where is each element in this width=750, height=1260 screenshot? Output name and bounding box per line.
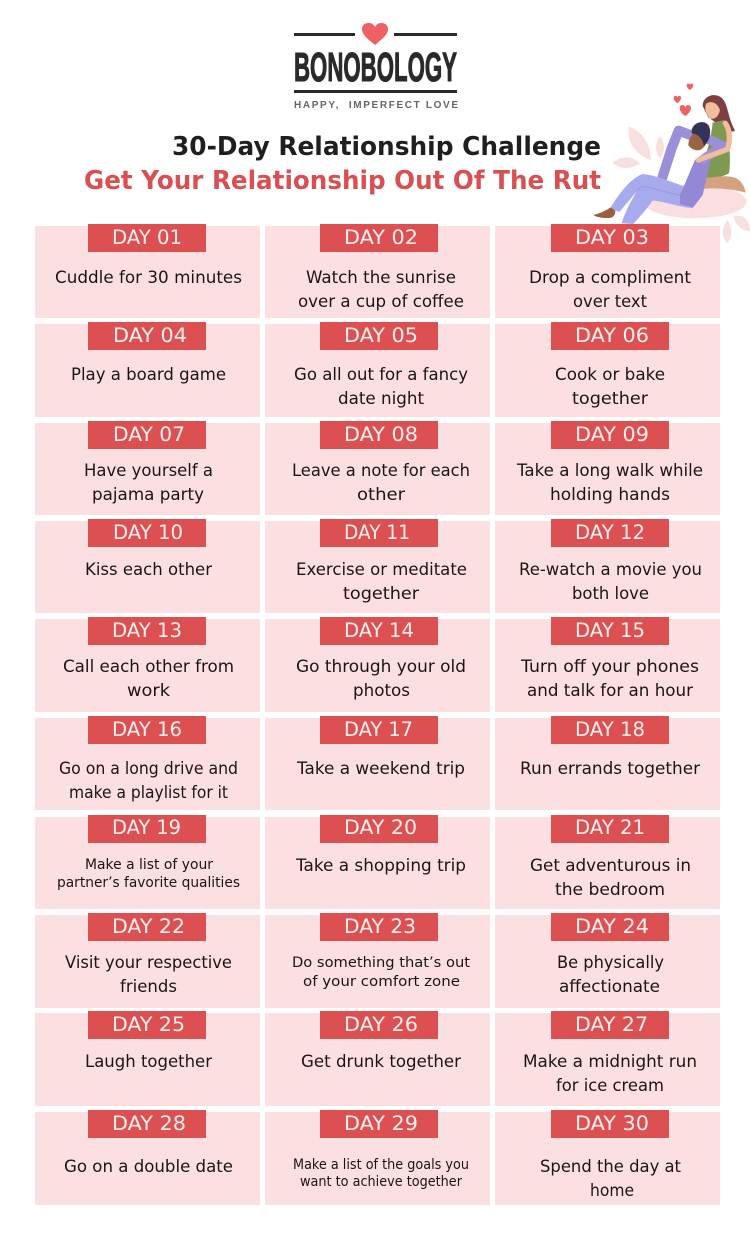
panel: day 02 xyxy=(265,224,490,318)
panel: day 12: DAY 12 xyxy=(575,521,645,544)
panel: day 16: Go on a long drive and xyxy=(59,759,238,779)
panel: day 06 xyxy=(495,322,720,417)
panel: day 30: home xyxy=(590,1181,634,1201)
panel: day 24: affectionate xyxy=(559,977,660,997)
panel: day 11: DAY 11 xyxy=(344,521,410,544)
panel: day 15: and talk for an hour xyxy=(527,681,693,701)
panel: day 25 xyxy=(35,1011,260,1106)
panel: day 11: Exercise or meditate xyxy=(296,560,467,580)
panel: day 23: Do something that’s out xyxy=(292,955,470,971)
panel: day 05: DAY 05 xyxy=(344,324,418,347)
panel: day 06: Cook or bake xyxy=(555,365,665,385)
panel: day 21 xyxy=(495,815,720,909)
panel: day 28: Go on a double date xyxy=(64,1157,233,1177)
panel: day 16: DAY 16 xyxy=(112,718,182,741)
panel: day 05 xyxy=(265,322,490,417)
panel: day 22 xyxy=(35,913,260,1008)
panel: day 14: DAY 14 xyxy=(344,619,414,642)
panel: day 21: DAY 21 xyxy=(575,816,645,839)
panel: day 13 xyxy=(35,617,260,712)
panel: day 14: photos xyxy=(353,681,410,701)
panel: day 12: both love xyxy=(572,584,649,604)
panel: day 18 xyxy=(495,716,720,810)
panel: day 19: Make a list of your xyxy=(85,857,213,873)
panel: day 23: of your comfort zone xyxy=(303,974,460,990)
panel: day 17: DAY 17 xyxy=(344,718,413,741)
logo: Bonobology xyxy=(294,23,458,111)
panel: day 09: DAY 09 xyxy=(575,423,649,446)
subtitle: Get Your Relationship Out Of The Rut xyxy=(84,166,601,196)
panel: day 13: Call each other from xyxy=(63,657,234,677)
panel: day 24: DAY 24 xyxy=(575,915,649,938)
panel: day 25: DAY 25 xyxy=(112,1013,185,1036)
panel: day 03: Drop a compliment xyxy=(529,268,691,288)
panel: day 20: DAY 20 xyxy=(344,816,417,839)
panel: day 09: Take a long walk while xyxy=(516,461,703,481)
panel: day 15: DAY 15 xyxy=(575,619,645,642)
panel: day 01: Cuddle for 30 minutes xyxy=(55,268,242,288)
panel: day 12: Re-watch a movie you xyxy=(519,560,702,580)
woman xyxy=(703,95,735,132)
panel: day 15: Turn off your phones xyxy=(520,657,699,677)
panel: day 05: Go all out for a fancy xyxy=(294,365,468,385)
panel: day 29: DAY 29 xyxy=(344,1112,418,1135)
panel: day 30 xyxy=(495,1110,720,1205)
panel: day 20 xyxy=(265,815,490,909)
man: legs xyxy=(610,174,693,224)
panel: day 19: partner’s favorite qualities xyxy=(57,875,240,891)
panel: day 01: DAY 01 xyxy=(112,226,182,249)
panel: day 07: DAY 07 xyxy=(113,423,185,446)
panel: day 04: DAY 04 xyxy=(113,324,187,347)
cushion xyxy=(643,185,747,218)
panel: day 25: Laugh together xyxy=(85,1052,212,1072)
panel: day 22: DAY 22 xyxy=(112,915,185,938)
panel: day 29: want to achieve together xyxy=(300,1174,462,1190)
panel: day 09: holding hands xyxy=(550,485,670,505)
panel: day 09 xyxy=(495,421,720,515)
panel: day 03: over text xyxy=(573,292,647,312)
panel: day 11 xyxy=(265,519,490,613)
hearts xyxy=(674,83,693,116)
panel: day 18: DAY 18 xyxy=(575,718,645,741)
panel: day 13: DAY 13 xyxy=(112,619,182,642)
panel: day 23: DAY 23 xyxy=(344,915,416,938)
title: 30-Day Relationship Challenge xyxy=(172,132,601,162)
panel: day 26 xyxy=(265,1011,490,1106)
panel: day 17: Take a weekend trip xyxy=(296,759,465,779)
panel: day 24 xyxy=(495,913,720,1008)
panel: day 07 xyxy=(35,421,260,515)
logo: Bonobology: HAPPY, IMPERFECT LOVE xyxy=(294,100,458,111)
panel: day 04 xyxy=(35,322,260,417)
panel: day 05: date night xyxy=(338,389,424,409)
panel: day 14: Go through your old xyxy=(296,657,466,677)
panel: day 04: Play a board game xyxy=(71,365,226,385)
panel: day 06: DAY 06 xyxy=(575,324,649,347)
panel: day 22: Visit your respective xyxy=(65,953,232,973)
panel: day 08 xyxy=(265,421,490,515)
panel: day 02: DAY 02 xyxy=(344,226,418,249)
woman: arm xyxy=(698,123,729,160)
panel: day 28 xyxy=(35,1110,260,1205)
panel: day 27: Make a midnight run xyxy=(523,1052,697,1072)
panel: day 10: DAY 10 xyxy=(113,521,183,544)
panel: day 07: pajama party xyxy=(92,485,204,505)
panel: day 08: other xyxy=(357,485,405,505)
panel: day 08: DAY 08 xyxy=(344,423,418,446)
panel: day 19: DAY 19 xyxy=(112,816,181,839)
man: jacket and arms xyxy=(680,148,713,207)
panel: day 06: together xyxy=(572,389,648,409)
panel: day 23 xyxy=(265,913,490,1008)
leaves xyxy=(612,127,750,243)
panel: day 21: Get adventurous in xyxy=(530,856,691,876)
panel: day 16 xyxy=(35,716,260,810)
panel: day 01 xyxy=(35,224,260,318)
panel: day 03 xyxy=(495,224,720,318)
panel: day 02: over a cup of coffee xyxy=(298,292,464,312)
panel: day 26: Get drunk together xyxy=(301,1052,461,1072)
man: shirt xyxy=(667,148,698,187)
panel: day 10: Kiss each other xyxy=(85,560,212,580)
panel: day 28: DAY 28 xyxy=(112,1112,186,1135)
panel: day 24: Be physically xyxy=(557,953,664,973)
panel: day 29 xyxy=(265,1110,490,1205)
panel: day 29: Make a list of the goals you xyxy=(293,1157,469,1173)
panel: day 16: make a playlist for it xyxy=(69,783,228,803)
icon: heart xyxy=(362,23,388,45)
logo: Bonobology: BONOBOLOGY xyxy=(294,44,457,90)
panel: day 13: work xyxy=(127,681,170,701)
illustration: couple cuddling xyxy=(593,83,750,243)
panel: day 27: for ice cream xyxy=(556,1076,664,1096)
panel: day 22: friends xyxy=(120,977,177,997)
panel: day 19 xyxy=(35,815,260,909)
panel: day 27: DAY 27 xyxy=(575,1013,648,1036)
panel: day 30: Spend the day at xyxy=(540,1157,681,1177)
panel: day 20: Take a shopping trip xyxy=(295,856,466,876)
panel: day 17 xyxy=(265,716,490,810)
panel: day 07: Have yourself a xyxy=(84,461,213,481)
panel: day 21: the bedroom xyxy=(555,880,665,900)
panel: day 14 xyxy=(265,617,490,712)
panel: day 11: together xyxy=(343,584,419,604)
panel: day 03: DAY 03 xyxy=(575,226,649,249)
panel: day 18: Run errands together xyxy=(520,759,700,779)
panel: day 15 xyxy=(495,617,720,712)
panel: day 12 xyxy=(495,519,720,613)
panel: day 30: DAY 30 xyxy=(575,1112,649,1135)
man: shoe xyxy=(593,207,615,218)
panel: day 02: Watch the sunrise xyxy=(306,268,456,288)
man: head xyxy=(688,132,706,150)
panel: day 26: DAY 26 xyxy=(344,1013,418,1036)
panel: day 27 xyxy=(495,1011,720,1106)
panel: day 08: Leave a note for each xyxy=(292,461,470,481)
panel: day 10 xyxy=(35,519,260,613)
